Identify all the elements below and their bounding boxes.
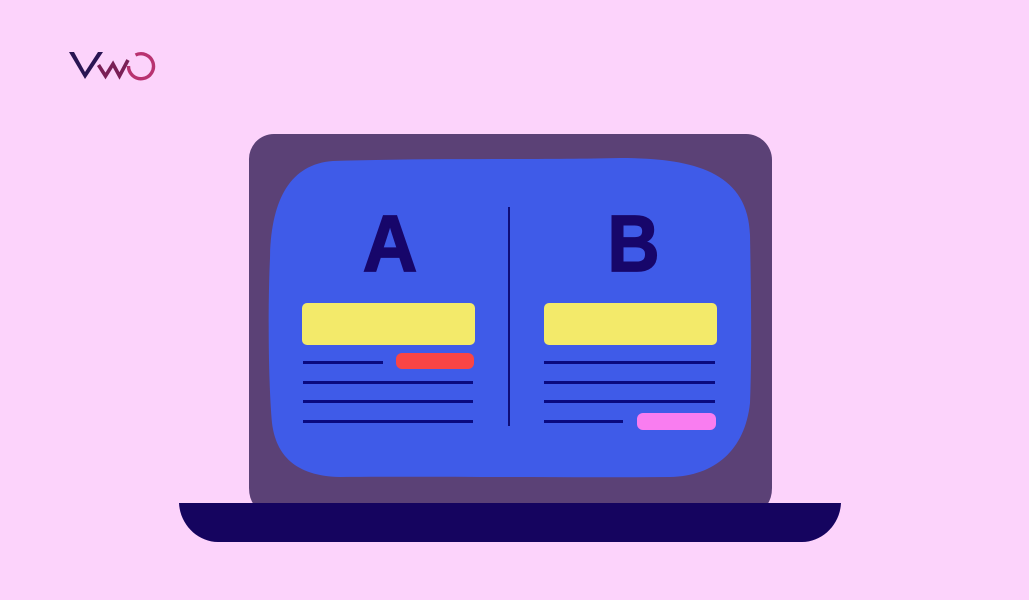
letter B: B	[608, 200, 659, 289]
divider	[508, 207, 510, 426]
letter A: A	[363, 200, 417, 289]
laptop screen	[269, 158, 751, 477]
variant B	[544, 200, 717, 430]
laptop base	[179, 503, 841, 542]
text lines A	[303, 361, 473, 423]
variant A	[302, 200, 475, 423]
laptop	[179, 134, 841, 542]
red button A	[396, 353, 474, 369]
yellow headline bar A	[302, 303, 475, 345]
logo V	[69, 52, 103, 79]
pink button B	[637, 413, 716, 430]
yellow headline bar B	[544, 303, 717, 345]
logo O	[128, 54, 153, 79]
logo W	[98, 60, 128, 76]
text lines B	[544, 361, 715, 423]
laptop body	[249, 134, 772, 505]
logo: VWO	[69, 52, 153, 79]
